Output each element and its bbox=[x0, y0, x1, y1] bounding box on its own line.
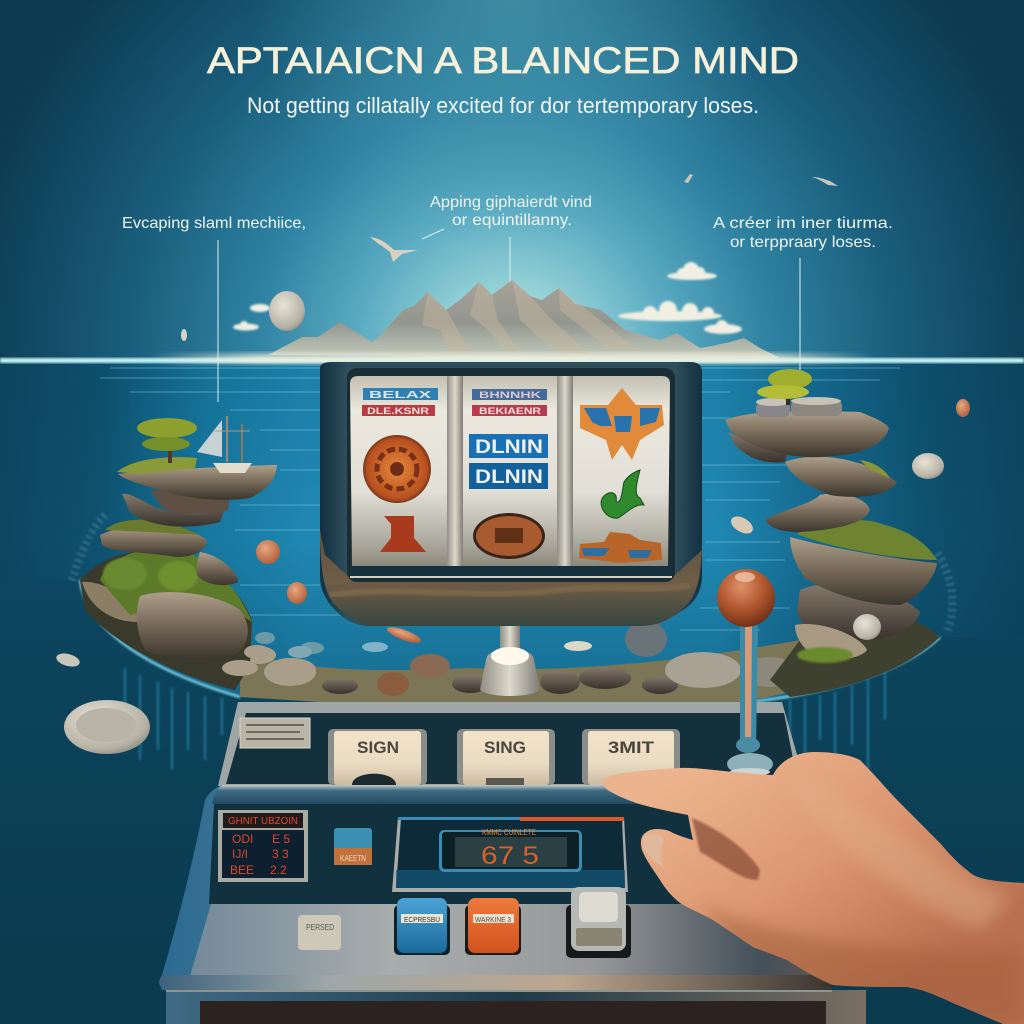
central display bbox=[392, 817, 628, 892]
chrome band bbox=[212, 785, 690, 804]
reel housing bbox=[320, 362, 702, 626]
callout: centre: or equintillanny. bbox=[452, 212, 572, 229]
palm fold shadow bbox=[692, 818, 760, 880]
middle dark panel bbox=[209, 804, 830, 904]
button: orange bbox=[465, 898, 521, 955]
open sea bbox=[0, 360, 1024, 720]
callout: centre: Apping giphaierdt vind bbox=[430, 194, 592, 211]
left rock stack island bbox=[80, 416, 316, 690]
red score panel bbox=[218, 810, 308, 882]
icon: oval emblem bbox=[473, 513, 545, 559]
reel 1 bbox=[350, 376, 447, 568]
icon: coin stack bbox=[756, 397, 842, 417]
thumbnail bbox=[643, 834, 664, 868]
steel deck bbox=[190, 904, 860, 976]
clouds bbox=[233, 262, 742, 334]
callout: right bbox=[713, 215, 893, 372]
central display: KMMC CUINLETE bbox=[482, 828, 536, 837]
key: SIGN bbox=[328, 729, 427, 785]
red score panel: IJ/I bbox=[232, 847, 248, 861]
small blue orange button: KAEETN bbox=[340, 854, 366, 863]
button: beige bbox=[298, 915, 341, 950]
reel 2: BEKIAENR bbox=[479, 406, 542, 416]
subtitle: Not getting cillatally excited for dor tertemporary loses. bbox=[247, 93, 759, 118]
red score panel: E 5 bbox=[272, 832, 290, 846]
upper panel with chrome frame bbox=[218, 702, 806, 786]
callout: centre bbox=[422, 194, 592, 362]
reel dividers bbox=[447, 376, 573, 572]
slot machine control console bbox=[159, 569, 866, 1024]
knuckle highlight bbox=[836, 814, 1006, 930]
key: SING: SING bbox=[484, 738, 526, 757]
sky background bbox=[0, 0, 1024, 362]
lever bbox=[717, 569, 775, 776]
callout: right: A créer im iner tiurma. bbox=[713, 215, 893, 232]
wrist shadow bbox=[700, 905, 1024, 1024]
slot machine reels bbox=[320, 362, 702, 626]
icon: green J bbox=[601, 470, 644, 518]
key: 3MIT: 3MIT bbox=[608, 738, 655, 757]
red score panel: 3 3 bbox=[272, 847, 289, 861]
red score panel: GHNIT UBZOIN bbox=[228, 816, 298, 827]
island base ring bbox=[202, 632, 860, 707]
key: SIGN: SIGN bbox=[357, 738, 399, 757]
icon: bonsai tree bbox=[137, 418, 197, 463]
red score panel: BEE bbox=[230, 863, 254, 877]
button: silver bbox=[566, 887, 631, 958]
reel 3 bbox=[573, 376, 670, 568]
icon: crest bbox=[580, 388, 664, 460]
icon: bonsai tree bbox=[757, 369, 812, 405]
reel 2: DLNIN bbox=[475, 437, 543, 458]
icon: pebbles bbox=[222, 645, 316, 682]
red score panel: 2.2 bbox=[270, 863, 287, 877]
icon: sailing ship bbox=[197, 416, 252, 473]
button: blue bbox=[394, 898, 450, 955]
small blue orange button bbox=[334, 828, 372, 865]
button: blue: ECPRESBU bbox=[404, 917, 440, 924]
button: beige: PERSED bbox=[306, 923, 334, 932]
mountains bbox=[268, 280, 780, 358]
title: APTAIAICN A BLAINCED MIND bbox=[207, 40, 799, 81]
deep water below the island disc bbox=[0, 515, 1024, 1024]
red score panel: ODI bbox=[232, 832, 253, 846]
icon: red pillar bbox=[380, 516, 426, 552]
horizon glow bbox=[0, 354, 1024, 363]
icon: scattered coins bbox=[55, 291, 970, 779]
callout: left: Evcaping slaml mechiice, bbox=[122, 215, 306, 232]
pedestal under reels bbox=[480, 625, 540, 696]
icon: bottom emblem bbox=[579, 532, 662, 563]
lower body frame bbox=[160, 785, 832, 990]
callout: right: or terppraary loses. bbox=[730, 234, 876, 251]
icon: orange medallion bbox=[363, 435, 431, 503]
base cabinet bbox=[166, 990, 866, 1024]
button: orange: WARKINE 3 bbox=[475, 917, 511, 924]
icon: distant birds bbox=[684, 174, 838, 186]
reel 2 bbox=[463, 376, 557, 568]
key: SING bbox=[457, 729, 555, 785]
icon: seagull bbox=[370, 237, 418, 262]
hand pressing the console bbox=[603, 752, 1024, 1024]
info plate bbox=[240, 718, 310, 748]
reel 1: BELAX bbox=[369, 390, 432, 401]
right rock stack island bbox=[725, 369, 940, 697]
front chrome lip bbox=[159, 975, 832, 990]
key: 3MIT bbox=[582, 729, 680, 785]
reel 1: DLE.KSNR bbox=[367, 406, 430, 416]
central display: 67 5 bbox=[481, 842, 539, 870]
reel 2: BHNNHK bbox=[479, 390, 542, 400]
reel 2: DLNIN bbox=[475, 467, 543, 488]
